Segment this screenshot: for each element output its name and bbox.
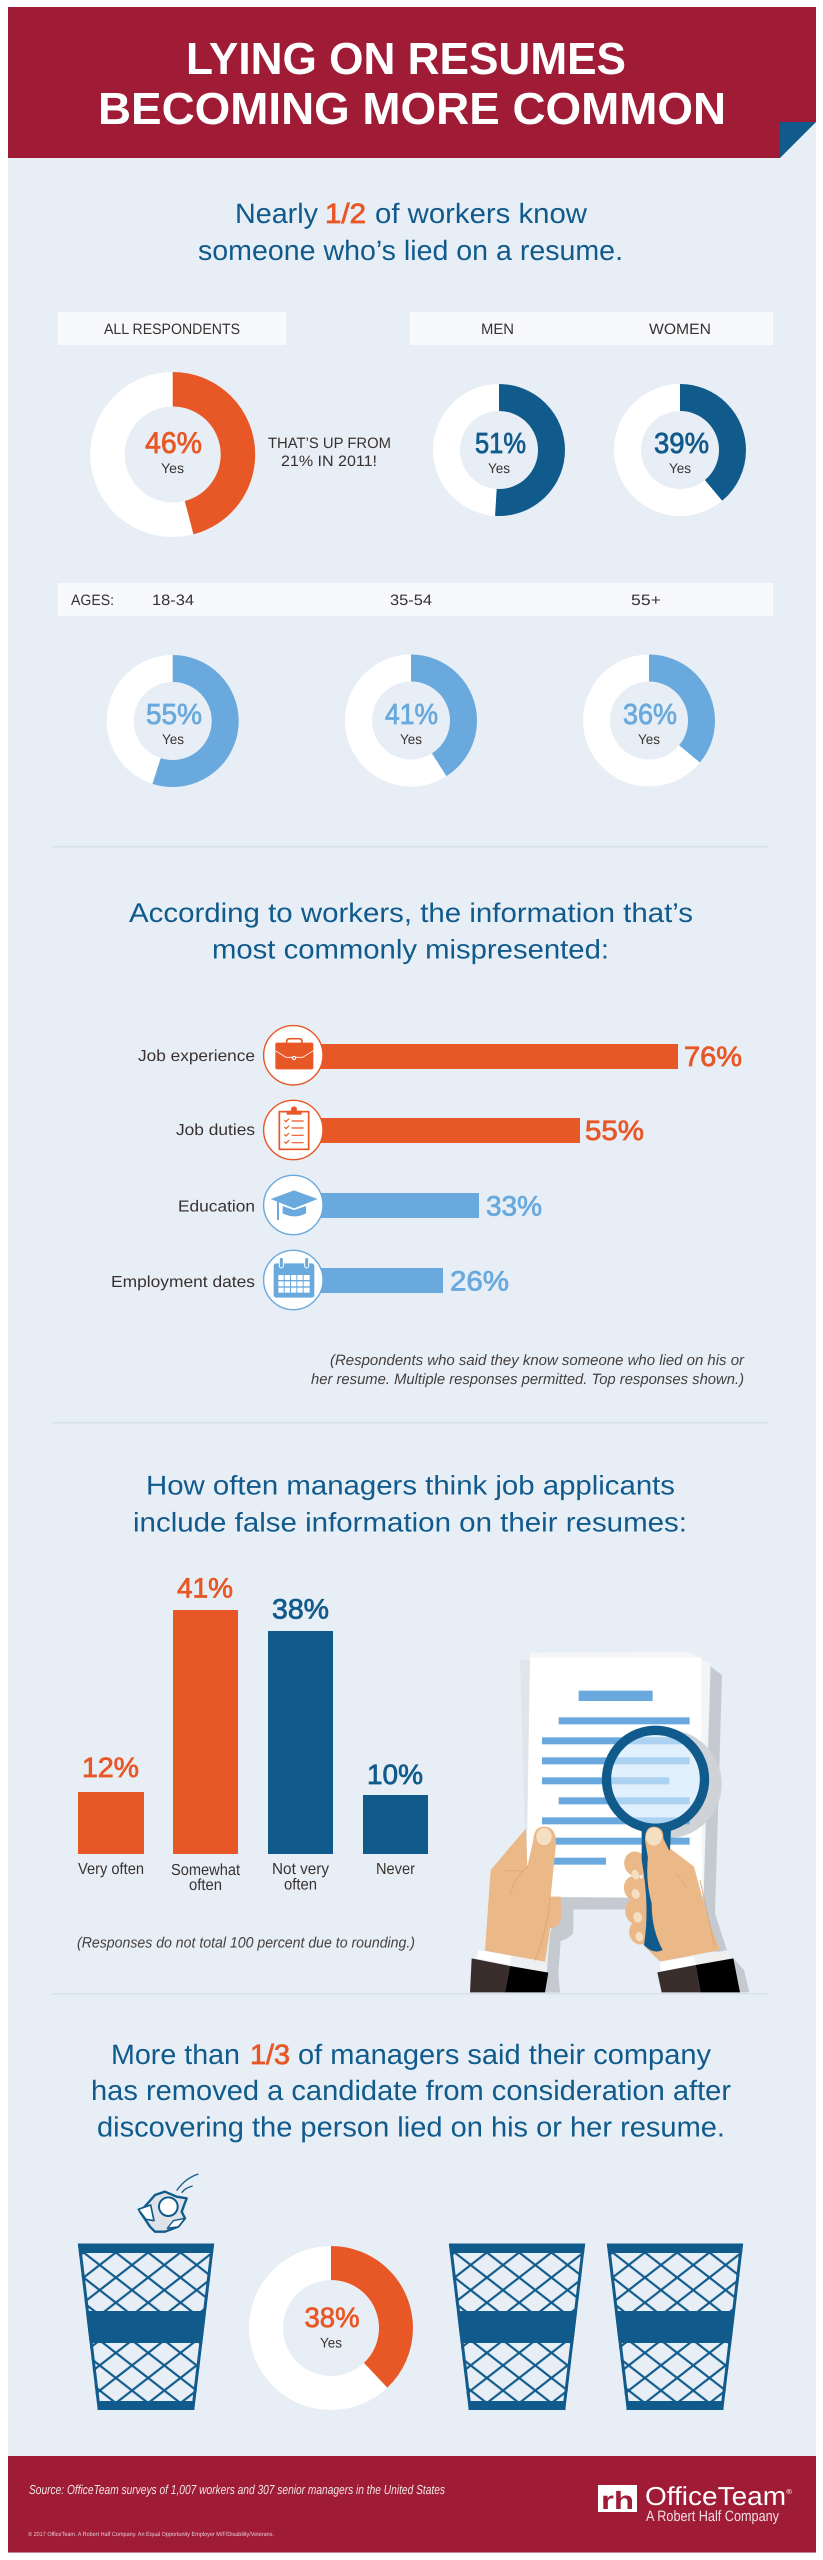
bar chart: how often false information (78, 1572, 428, 1894)
donut: age 55+ 36%: 36% (623, 699, 677, 731)
donut: men 51% (446, 398, 552, 502)
heading: nearly half of workers (198, 198, 623, 266)
row: job experience: 76% (684, 1041, 742, 1072)
donut: age 18-34 55%: Yes (162, 731, 184, 747)
bar: somewhat often 41%: often (189, 1877, 222, 1894)
callout: up from 21% in 2011: THAT’S UP FROM (268, 435, 391, 452)
band: men and women (410, 312, 773, 345)
heading: most commonly misrepresented: most commonly mispresented: (212, 934, 609, 964)
band: all respondents: ALL RESPONDENTS (104, 321, 240, 338)
donut: all respondents 46%: 46% (145, 427, 202, 460)
heading: more than one third of managers: discovering the person lied on his or her resume. (97, 2112, 725, 2142)
wastebasket 2 (449, 2244, 585, 2410)
icon: calendar (274, 1257, 314, 1298)
row: education: Education (178, 1198, 255, 1216)
footer (8, 2456, 816, 2552)
donut: age 18-34 55%: 55% (146, 699, 202, 731)
icon: crumpled paper (138, 2174, 198, 2232)
header banner (8, 7, 816, 158)
donut: age 55+ 36%: Yes (638, 731, 660, 747)
copyright text: © 2017 OfficeTeam. A Robert Half Company. An Equal Opportunity Employer M/F/Disability/Veterans. (28, 2531, 274, 2538)
donut: removed candidate 38% (266, 2263, 396, 2393)
band: ages: 35-54 (390, 592, 432, 609)
bar: very often 12%: Very often (78, 1861, 144, 1878)
title: LYING ON RESUMES (186, 33, 626, 84)
logo: OfficeTeam: OfficeTeam (645, 2481, 786, 2511)
donut: men 51%: Yes (488, 460, 510, 476)
donut: women 39%: Yes (669, 460, 691, 476)
donut: age 55+ 36% (596, 668, 702, 773)
callout: up from 21% in 2011: 21% IN 2011! (281, 453, 377, 470)
donut: age 35-54 41%: 41% (385, 699, 438, 731)
heading: nearly half of workers: of workers know (375, 198, 588, 229)
heading: nearly half of workers: someone who’s lied on a resume. (198, 235, 623, 266)
donut: men 51%: 51% (475, 428, 526, 460)
band: ages: 18-34 (152, 592, 194, 609)
illustration: hands holding resume and magnifying glass (470, 1652, 749, 1992)
heading: how often managers think (133, 1470, 687, 1538)
icon: graduation cap (271, 1190, 318, 1220)
right hand (637, 1848, 720, 1962)
donut: all respondents 46% (107, 389, 238, 520)
heading: nearly half of workers: 1/2 (325, 198, 366, 229)
bar: not very often 38%: 38% (272, 1594, 329, 1624)
left hand (485, 1827, 561, 1962)
band: ages (58, 583, 773, 616)
row: job duties: Job duties (176, 1122, 255, 1139)
donut: removed candidate 38%: Yes (320, 2334, 342, 2350)
icon: briefcase (275, 1039, 313, 1069)
title (98, 33, 726, 134)
bar: somewhat often 41%: 41% (177, 1572, 233, 1604)
heading: more than one third of managers: 1/3 (250, 2039, 290, 2070)
bar: somewhat often 41% (171, 1572, 241, 1894)
heading: how often managers think: How often managers think job applicants (146, 1470, 675, 1500)
heading: how often managers think: include false information on their resumes: (133, 1508, 687, 1538)
band: ages: 55+ (631, 592, 661, 609)
row: job duties: 55% (585, 1115, 644, 1146)
wastebasket 3 (607, 2244, 743, 2410)
donut: women 39%: 39% (654, 428, 709, 460)
title: BECOMING MORE COMMON (98, 83, 726, 134)
row: employment dates: Employment dates (111, 1274, 255, 1291)
row: education: 33% (486, 1190, 542, 1222)
heading: most commonly misrepresented: According to workers, the information that’s (129, 898, 693, 928)
band: men and women: MEN (481, 321, 514, 338)
heading: more than one third of managers (91, 2039, 731, 2142)
logo: OfficeTeam: A Robert Half Company (646, 2508, 779, 2525)
bar: never 10% (363, 1759, 428, 1878)
donut: women 39% (628, 398, 732, 502)
heading: more than one third of managers: has removed a candidate from consideration after (91, 2075, 731, 2106)
bar: not very often 38% (268, 1594, 333, 1894)
donut: removed candidate 38%: 38% (304, 2302, 360, 2333)
donut: age 35-54 41%: Yes (400, 731, 422, 747)
bar chart: misrepresented information (111, 1026, 742, 1310)
bar: very often 12%: 12% (82, 1752, 139, 1783)
bar: never 10%: Never (376, 1861, 416, 1878)
donut: age 18-34 55% (120, 668, 225, 774)
wastebasket 1 (78, 2244, 214, 2410)
bar: very often 12% (78, 1752, 144, 1878)
heading: nearly half of workers: Nearly (235, 198, 318, 229)
band: ages: AGES: (71, 592, 114, 609)
footnote: respondents (311, 1352, 745, 1388)
row: employment dates: 26% (450, 1266, 509, 1296)
bar: never 10%: 10% (367, 1759, 423, 1790)
bar: not very often 38%: often (284, 1876, 317, 1894)
footnote: rounding: (Responses do not total 100 percent due to rounding.) (77, 1934, 415, 1952)
callout: up from 21% in 2011 (268, 435, 391, 470)
row: job duties (176, 1100, 644, 1160)
band: men and women: WOMEN (649, 321, 711, 338)
source text: Source: OfficeTeam surveys of 1,007 workers and 307 senior managers in the United States (29, 2482, 445, 2497)
icon: clipboard checklist (279, 1106, 309, 1149)
footnote: respondents: her resume. Multiple responses permitted. Top responses shown.) (311, 1371, 744, 1388)
footnote: respondents: (Respondents who said they know someone who lied on his or (330, 1352, 745, 1369)
row: job experience: Job experience (138, 1048, 255, 1065)
logo: OfficeTeam: ® (786, 2489, 793, 2496)
heading: most commonly misrepresented (129, 898, 693, 964)
logo: OfficeTeam: rh (601, 2487, 634, 2515)
logo: OfficeTeam (598, 2481, 793, 2525)
row: education (178, 1175, 542, 1235)
bar: somewhat often 41%: Somewhat (171, 1862, 241, 1879)
band: all respondents (58, 312, 286, 345)
suit sleeves (470, 1958, 701, 1992)
donut: age 35-54 41% (358, 668, 464, 773)
row: job experience (138, 1026, 742, 1085)
shirt cuffs (477, 1950, 696, 1972)
donut: all respondents 46%: Yes (161, 460, 184, 476)
bar: not very often 38%: Not very (272, 1861, 329, 1878)
heading: more than one third of managers: of managers said their company (298, 2039, 711, 2070)
row: employment dates (111, 1250, 509, 1310)
heading: more than one third of managers: More than (111, 2039, 240, 2070)
